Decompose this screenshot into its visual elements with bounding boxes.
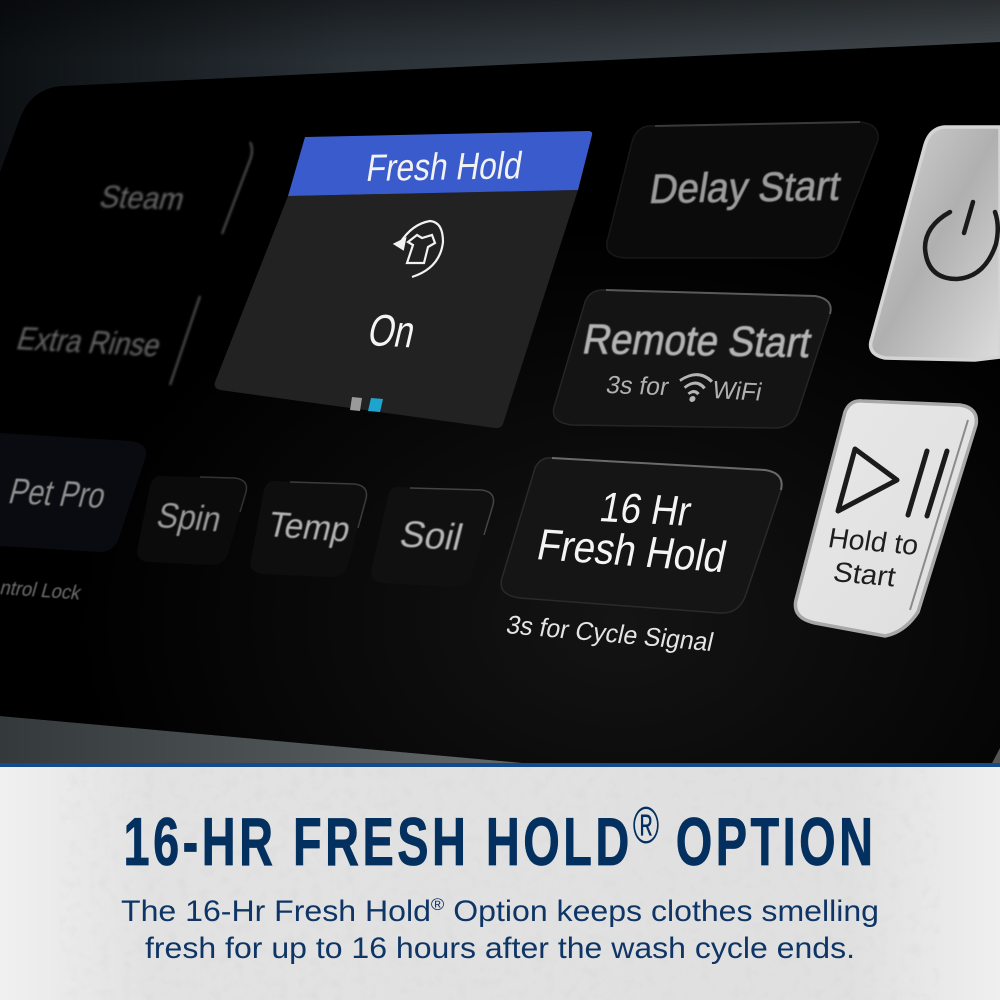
button: Pet Pro bbox=[0, 433, 146, 552]
button: Temp: Temp bbox=[264, 504, 355, 549]
blue divider band bbox=[0, 763, 1000, 767]
description: The 16-Hr Fresh Hold bbox=[121, 895, 411, 928]
button: power bbox=[871, 127, 1000, 360]
button: Remote Start: WiFi bbox=[710, 376, 765, 406]
description: Option keeps clothes smelling bbox=[444, 895, 879, 928]
screen body bbox=[215, 190, 578, 428]
display value: On: On bbox=[364, 305, 420, 357]
icon: pause bars bbox=[908, 451, 947, 516]
button: play/pause hold to start: Hold to bbox=[826, 522, 921, 561]
heading: 16-HR FRESH HOLD bbox=[124, 804, 861, 880]
button: Remote Start bbox=[553, 290, 831, 428]
button: Remote Start: Remote Start bbox=[579, 315, 815, 366]
button: Delay Start: Delay Start bbox=[647, 163, 844, 212]
button: Extra Rinse: Extra Rinse bbox=[13, 321, 165, 363]
button: Steam bbox=[96, 142, 252, 234]
icon: shirt with cycle arrow bbox=[395, 221, 443, 277]
button: Delay Start bbox=[607, 122, 878, 258]
description: fresh for up to 16 hours after the wash cycle ends. bbox=[145, 932, 855, 965]
icon: wifi bbox=[676, 374, 713, 401]
button: Pet Pro: Pet Pro bbox=[5, 471, 111, 516]
button: Spin: Spin bbox=[153, 495, 226, 539]
button: Temp bbox=[250, 481, 367, 577]
heading: OPTION bbox=[659, 804, 876, 880]
blue header bbox=[288, 131, 592, 196]
button: Remote Start: 3s for bbox=[604, 371, 671, 401]
button: 16 Hr Fresh Hold: Fresh Hold bbox=[533, 521, 731, 582]
button: Extra Rinse bbox=[13, 296, 200, 385]
display title: Fresh Hold bbox=[364, 144, 525, 190]
heading: ® bbox=[633, 797, 659, 855]
description bbox=[121, 895, 879, 965]
label: 3s for Cycle Signal: 3s for Cycle Signal bbox=[504, 610, 717, 657]
washer body background bbox=[0, 0, 1000, 770]
icon: power symbol bbox=[925, 202, 998, 279]
display screen bbox=[215, 131, 592, 428]
button: Soil bbox=[371, 487, 494, 587]
button: 16 Hr Fresh Hold bbox=[501, 458, 782, 613]
button: Steam: Steam bbox=[96, 180, 189, 217]
control panel bbox=[0, 42, 1000, 765]
button: play/pause hold to start bbox=[795, 401, 976, 636]
caption panel bbox=[0, 767, 1000, 1000]
button: 16 Hr Fresh Hold: 16 Hr bbox=[596, 484, 695, 535]
page indicator dots bbox=[350, 397, 383, 412]
button: Spin bbox=[137, 476, 247, 565]
icon: play triangle bbox=[838, 449, 897, 511]
description: ® bbox=[431, 895, 445, 914]
label: Control Lock: ntrol Lock bbox=[0, 577, 84, 604]
button: play/pause hold to start: Start bbox=[831, 556, 898, 592]
button: Soil: Soil bbox=[396, 513, 467, 558]
